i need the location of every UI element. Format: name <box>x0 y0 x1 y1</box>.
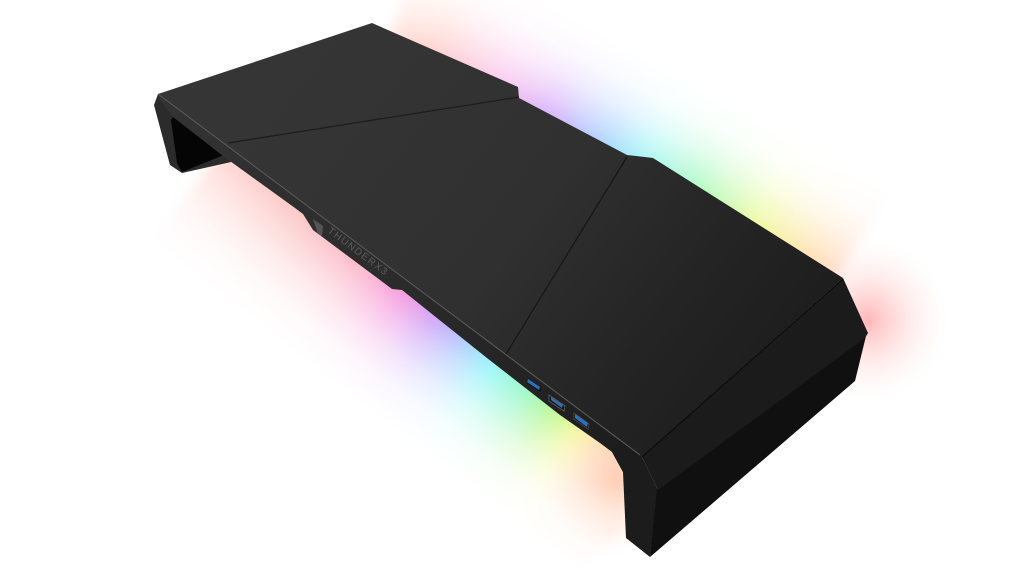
seam: end panel <box>642 279 843 457</box>
right leg peach glow <box>543 408 687 552</box>
brand wordmark: THUNDERX3 <box>325 226 390 278</box>
front edge highlight <box>158 94 640 455</box>
brand logo mark <box>313 219 323 236</box>
right leg front face <box>612 440 658 557</box>
top surface <box>158 23 843 457</box>
seam: rear panel <box>228 97 519 143</box>
stand body <box>154 23 868 557</box>
front edge band <box>158 94 642 472</box>
end side face <box>650 336 866 557</box>
front RGB glow <box>187 162 625 540</box>
USB port 2 <box>549 395 565 411</box>
left leg inner shadow <box>171 117 224 172</box>
back RGB glow <box>388 0 864 277</box>
USB port 1 <box>527 379 541 392</box>
end chamfer panel <box>642 278 868 490</box>
end corner red glow <box>788 240 948 400</box>
product illustration: RGB monitor stand <box>154 0 928 557</box>
left leg outer face <box>154 94 240 173</box>
seam: middle panel <box>506 157 627 354</box>
USB port 3 <box>574 413 589 429</box>
